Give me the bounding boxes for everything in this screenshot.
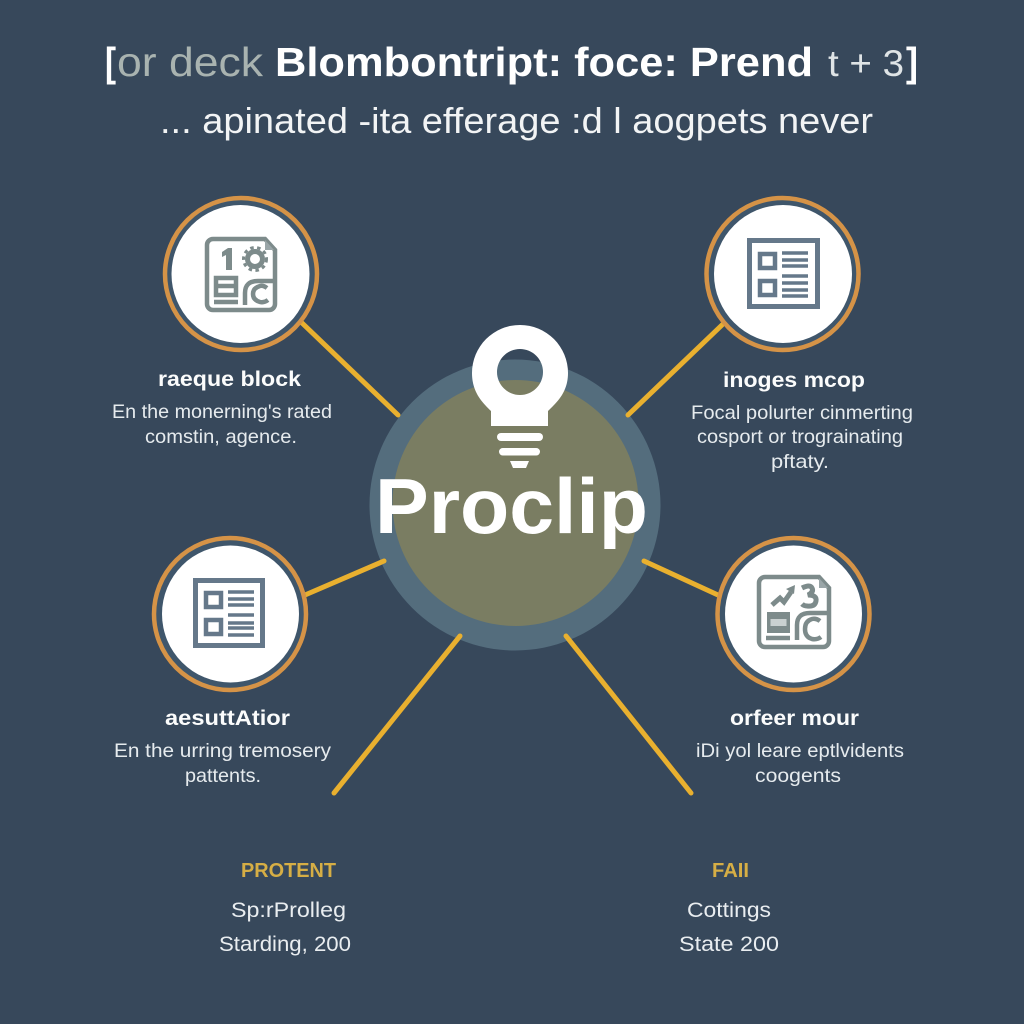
node: top left text: En the monerning's rated: [112, 401, 332, 423]
node: top left text: raeque block: [158, 368, 301, 391]
footer column: fail: Cottings: [687, 898, 771, 922]
subtitle: ... apinated -ita efferage :d l aogpets never: [160, 100, 873, 141]
node: top left icon: [165, 198, 317, 350]
node: top right icon: [706, 198, 858, 350]
node: bottom right icon: [718, 538, 870, 690]
hub outer ring: [370, 360, 660, 650]
title: t + 3: [828, 43, 904, 84]
node: bottom right text: [696, 707, 904, 787]
icon: document with gear: [207, 239, 275, 310]
icon: list document: [196, 580, 262, 646]
node: top right text: cosport or trograinating: [697, 426, 903, 448]
icon: list document: [750, 240, 818, 306]
footer column: fail: State 200: [679, 932, 779, 956]
node: bottom left text: aesuttAtior: [165, 707, 290, 730]
node: top right text: inoges mcop: [723, 369, 865, 392]
node: bottom right text: orfeer mour: [730, 707, 859, 730]
node: bottom right text: coogents: [755, 765, 841, 787]
node: top right text: [691, 369, 913, 473]
title: ]: [906, 39, 918, 85]
central hub: [370, 325, 660, 650]
icon: document with trend arrow: [759, 577, 829, 647]
node: bottom left text: [114, 707, 331, 787]
node: bottom right text: iDi yol leare eptlvidents: [696, 740, 904, 762]
footer column: protent: Starding, 200: [219, 932, 351, 956]
node: top right text: pftaty.: [771, 451, 829, 473]
node: bottom left text: pattents.: [185, 765, 261, 787]
connector lines: [301, 322, 722, 793]
node: top left text: comstin, agence.: [145, 426, 297, 448]
node: top left text: [112, 368, 332, 448]
title: [105, 39, 918, 85]
footer column: fail: [679, 860, 779, 956]
footer column: protent: Sp:rProlleg: [231, 898, 346, 922]
title: or deck: [117, 39, 264, 85]
title: Blombontript: foce: Prend: [275, 39, 813, 85]
node: bottom left text: En the urring tremosery: [114, 740, 331, 762]
hub inner disc: [392, 380, 638, 626]
icon: light bulb: [472, 325, 568, 468]
hub label: Proclip: [375, 462, 648, 550]
footer column: fail: FAII: [712, 860, 749, 882]
node: top right text: Focal polurter cinmerting: [691, 402, 913, 424]
node: bottom left icon: [154, 538, 306, 690]
title: [: [105, 39, 116, 85]
footer column: protent: PROTENT: [241, 860, 336, 882]
footer column: protent: [219, 860, 351, 956]
